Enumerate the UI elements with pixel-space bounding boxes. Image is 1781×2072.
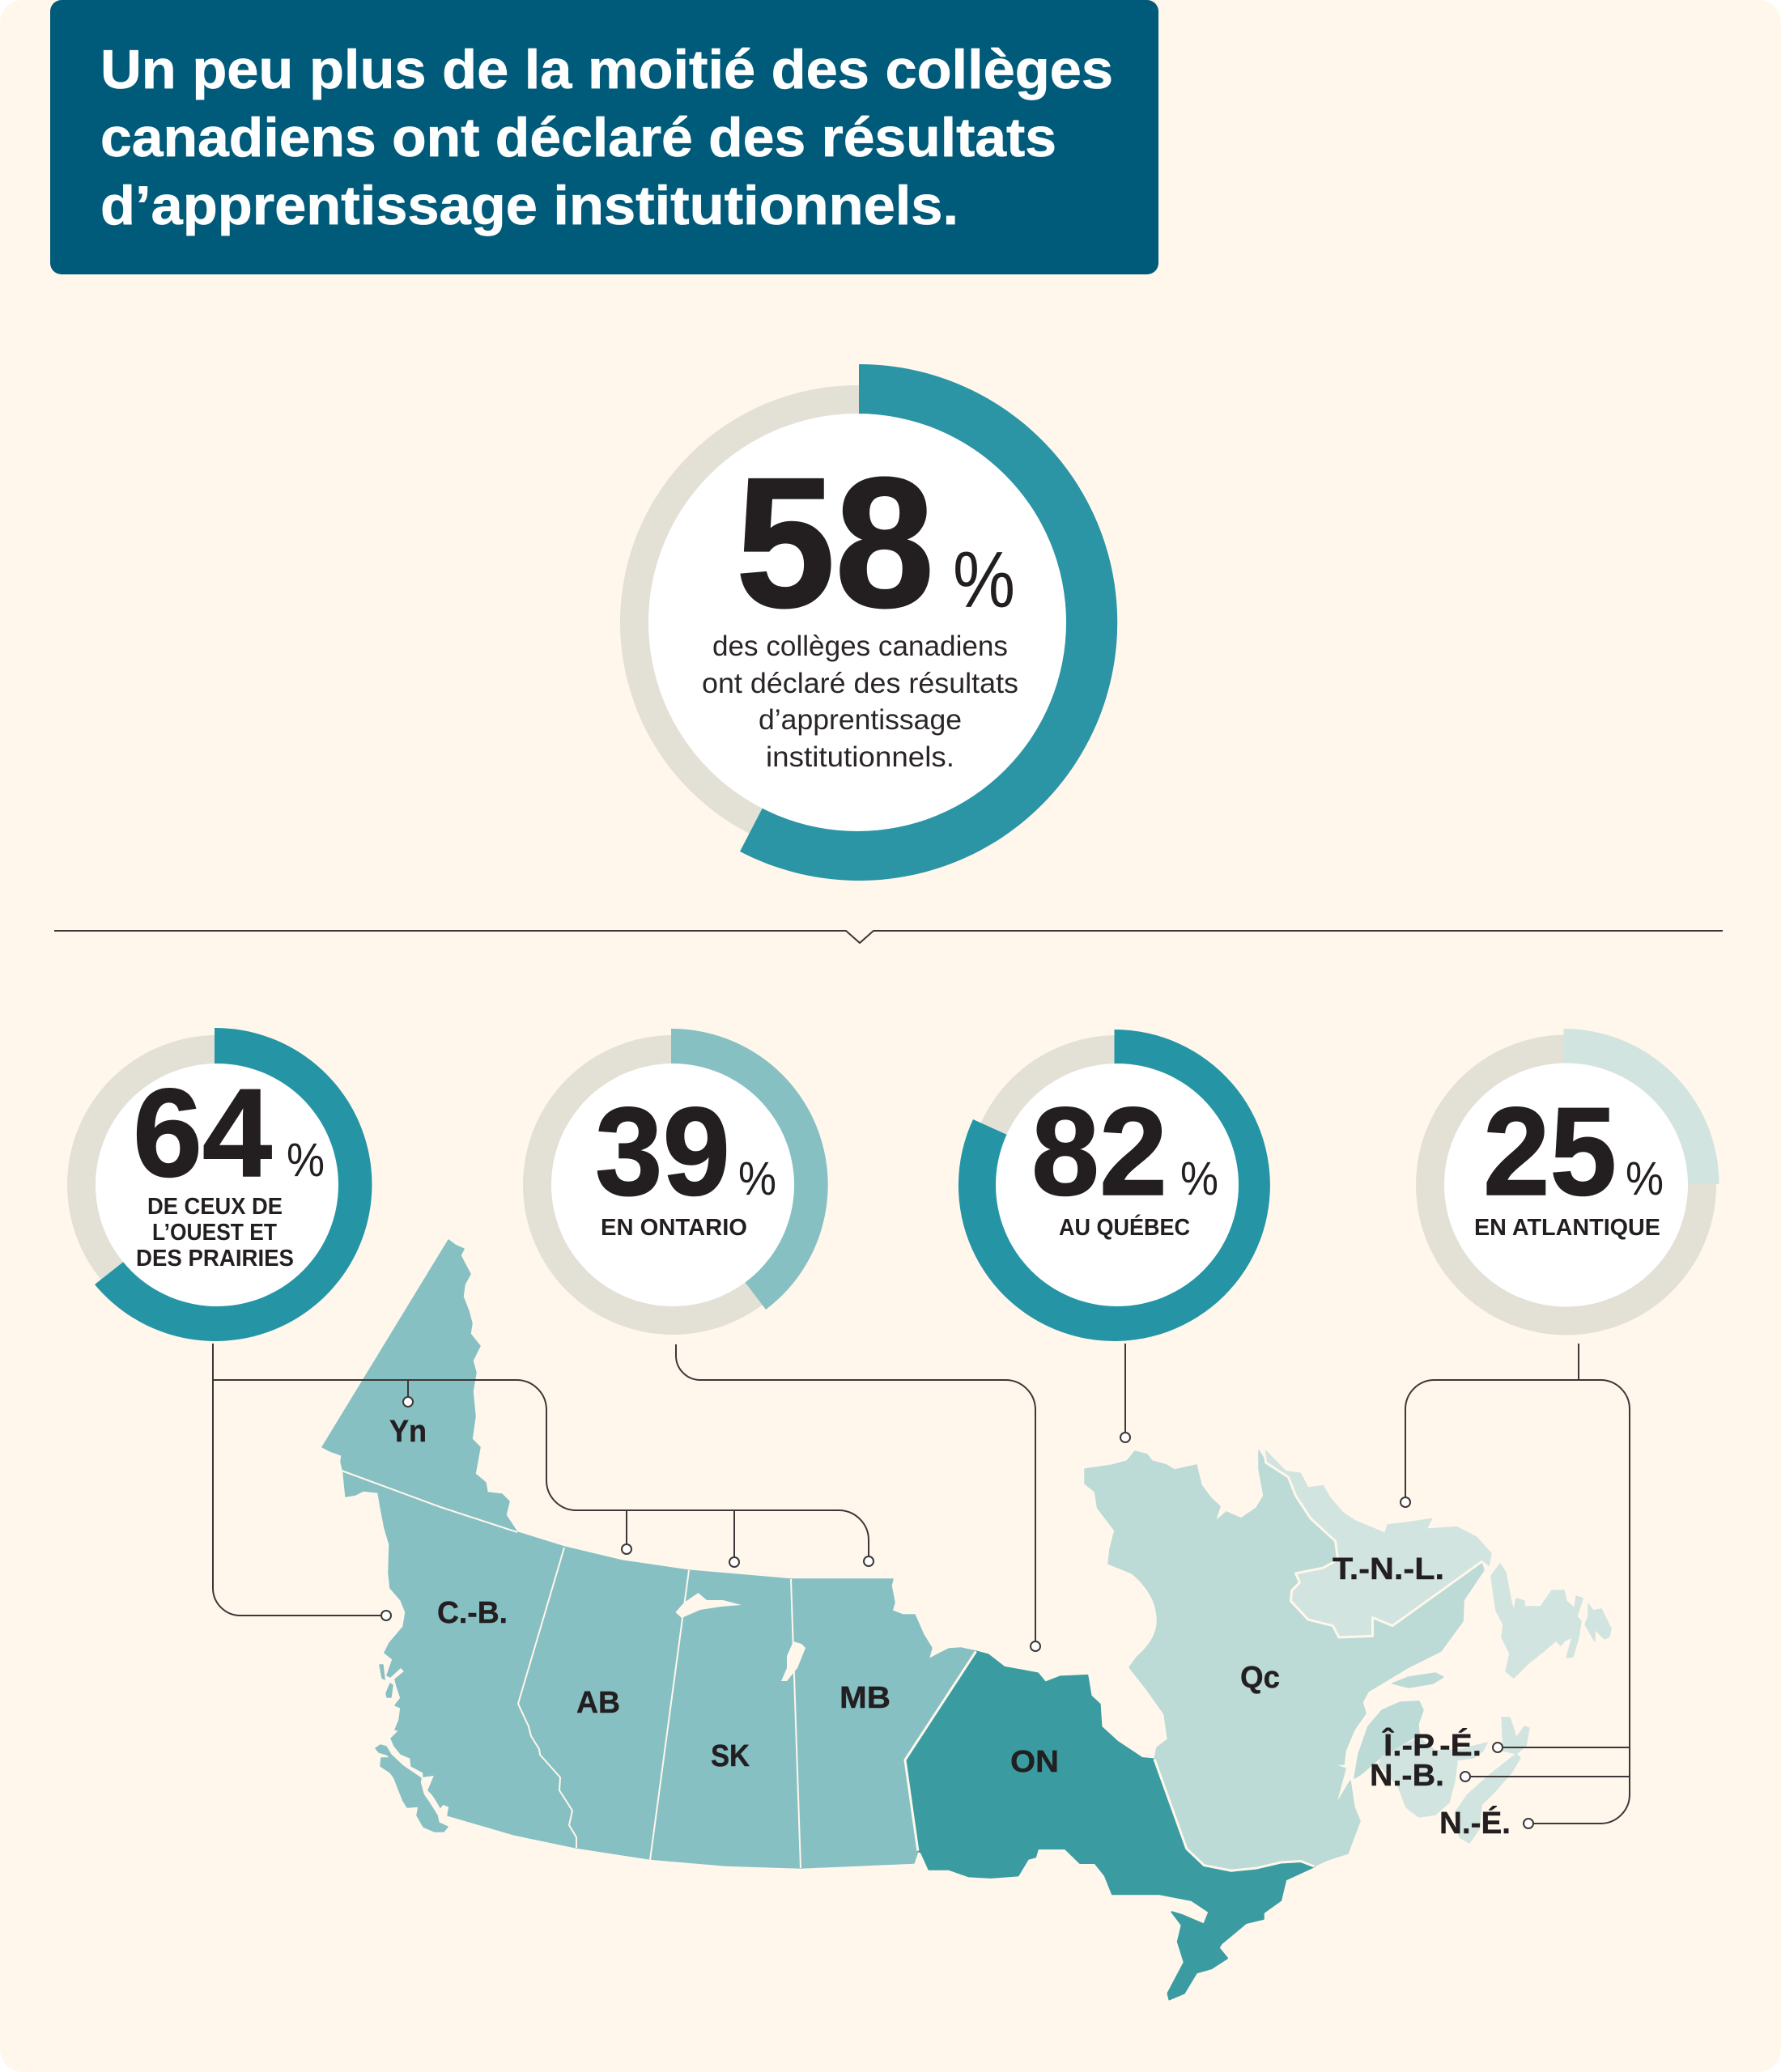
map labels: Î.-P.-É.	[1382, 1727, 1481, 1763]
Prince Edward Island	[1447, 1743, 1487, 1760]
map labels: Yn	[389, 1415, 427, 1449]
description: d’apprentissage	[759, 704, 962, 736]
label: DES PRAIRIES	[136, 1246, 294, 1272]
provincial borders	[342, 1471, 801, 1868]
Labrador	[1264, 1448, 1491, 1636]
label: AU QUÉBEC	[1059, 1213, 1190, 1241]
centre	[1444, 1064, 1688, 1306]
value: 82	[1031, 1081, 1167, 1221]
donut track	[620, 385, 1095, 860]
value arc	[1564, 1029, 1719, 1184]
Anticosti	[1392, 1673, 1443, 1688]
border Manitoba / Ontario	[905, 1651, 976, 1851]
percent sign: %	[953, 535, 1015, 624]
label	[136, 1194, 294, 1272]
title text: d’apprentissage institutionnels.	[100, 175, 959, 236]
connector: Ouest et Prairies	[213, 1344, 873, 1620]
western landmass	[322, 1240, 976, 1868]
map labels: ON	[1010, 1745, 1059, 1779]
New Brunswick	[1379, 1738, 1457, 1817]
value: 64	[133, 1063, 272, 1203]
Vancouver Island	[376, 1745, 448, 1832]
Haida Gwaii	[380, 1665, 385, 1679]
label: EN ATLANTIQUE	[1474, 1215, 1660, 1241]
Cape Breton	[1502, 1717, 1529, 1754]
Quebec	[1085, 1450, 1484, 1870]
title text	[100, 39, 1113, 236]
title text: canadiens ont déclaré des résultats	[100, 107, 1056, 168]
connector: Atlantique	[1401, 1344, 1630, 1828]
title text: Un peu plus de la moitié des collèges	[100, 39, 1113, 100]
donut: 25% Atlantique	[1416, 1029, 1719, 1335]
map labels: C.-B.	[437, 1596, 508, 1630]
description: ont déclaré des résultats	[702, 668, 1018, 699]
Reindeer Lake	[781, 1641, 805, 1681]
label: EN ONTARIO	[601, 1215, 747, 1241]
centre	[996, 1064, 1239, 1306]
Nova Scotia	[1455, 1754, 1520, 1843]
donut: 39% Ontario	[523, 1029, 828, 1335]
map labels: MB	[839, 1681, 890, 1715]
map labels: T.-N.-L.	[1333, 1552, 1444, 1586]
label: L’OUEST ET	[152, 1220, 277, 1246]
region: western provinces and Yukon	[322, 1240, 976, 1868]
map labels: SK	[711, 1739, 750, 1773]
value arc	[95, 1028, 372, 1341]
description: des collèges canadiens	[712, 631, 1008, 662]
title background	[50, 0, 1158, 274]
map labels	[389, 1415, 1511, 1841]
donut: 64% Ouest et Prairies	[67, 1028, 372, 1341]
map labels: AB	[576, 1686, 620, 1720]
percent sign: %	[287, 1134, 325, 1187]
Newfoundland east islet	[1585, 1604, 1611, 1641]
connector: Ontario	[676, 1344, 1040, 1651]
value: 39	[595, 1081, 730, 1221]
donut centre	[648, 414, 1066, 831]
region: Quebec and Atlantic	[1085, 1448, 1611, 1870]
track	[967, 1035, 1267, 1335]
value: 25	[1483, 1081, 1617, 1221]
track	[67, 1035, 367, 1335]
centre	[551, 1064, 794, 1306]
donut value arc	[740, 364, 1117, 881]
title panel	[50, 0, 1158, 274]
divider with chevron	[54, 931, 1723, 943]
Lake Athabasca	[675, 1593, 742, 1618]
description	[702, 631, 1018, 773]
value arc	[959, 1030, 1270, 1341]
Quebec-Labrador border	[1264, 1448, 1489, 1637]
track	[523, 1035, 822, 1335]
map of Canada	[322, 1240, 1611, 1999]
donut: 82% Québec	[959, 1030, 1270, 1341]
coastal island	[386, 1684, 393, 1697]
label: DE CEUX DE	[147, 1194, 283, 1220]
Gaspé	[1354, 1701, 1423, 1778]
connector: Québec	[1120, 1344, 1130, 1442]
centre	[96, 1064, 338, 1306]
value 58: 58	[736, 440, 934, 646]
border Ontario / Quebec	[1154, 1759, 1315, 1870]
Newfoundland	[1491, 1564, 1583, 1678]
percent sign: %	[1180, 1153, 1218, 1205]
region: Ontario	[905, 1651, 1315, 1999]
map labels: Qc	[1240, 1661, 1280, 1695]
main donut: 58%	[620, 364, 1117, 881]
track	[1416, 1034, 1716, 1335]
map labels: N.-É.	[1439, 1805, 1511, 1841]
percent sign: %	[738, 1153, 776, 1205]
map labels: N.-B.	[1370, 1759, 1444, 1793]
value arc	[671, 1029, 828, 1310]
percent sign: %	[1626, 1153, 1664, 1205]
description: institutionnels.	[766, 741, 954, 773]
